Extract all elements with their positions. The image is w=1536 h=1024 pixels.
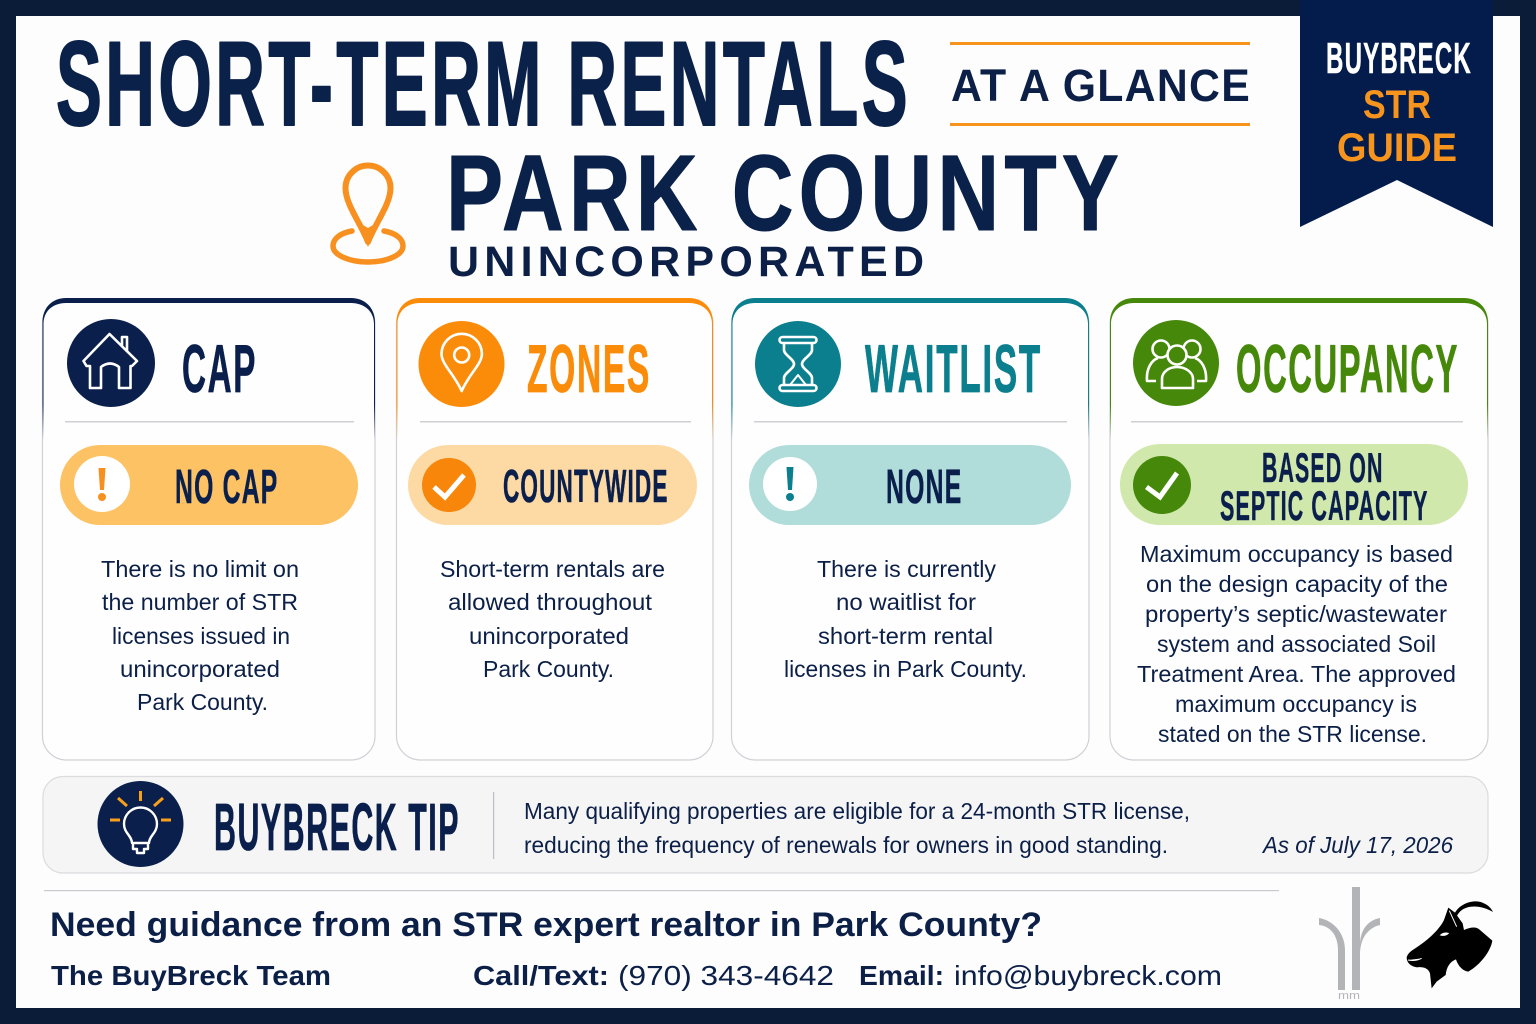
- text: occupancy description: system and associated Soil: [1157, 631, 1436, 657]
- footer contact line: Email:: [859, 960, 944, 991]
- text: tip body: Many qualifying properties are eligible for a 24-month STR license,: [524, 798, 1190, 824]
- icon: people: [1133, 320, 1219, 406]
- panel: occupancy: [1110, 298, 1488, 760]
- status pill: no cap: [60, 445, 358, 525]
- text: zones description: Short-term rentals are: [440, 556, 665, 582]
- text: occupancy description: stated on the STR license.: [1158, 721, 1427, 747]
- ribbon: buybreck str guide: STR: [1363, 83, 1431, 127]
- status pill: based on septic capacity: [1120, 444, 1468, 529]
- text: occupancy description: maximum occupancy is: [1175, 691, 1417, 717]
- text: zones description: allowed throughout: [448, 589, 652, 615]
- subtitle: at a glance: AT A GLANCE: [951, 60, 1251, 111]
- text: cap description: unincorporated: [120, 656, 280, 682]
- status pill: countywide: COUNTYWIDE: [503, 460, 668, 512]
- text: occupancy description: property’s septic/wastewater: [1145, 601, 1447, 627]
- footer contact line: The BuyBreck Team: [51, 960, 331, 991]
- status pill: no cap: NO CAP: [175, 461, 278, 514]
- panel: zones: ZONES: [527, 331, 651, 407]
- status pill: none: [749, 445, 1071, 525]
- text: cap description: [101, 556, 299, 715]
- text: waitlist description: licenses in Park County.: [784, 656, 1027, 682]
- footer contact line: (970) 343-4642: [618, 960, 834, 991]
- logo: grey mm mark: [1319, 887, 1380, 1002]
- status pill: none: NONE: [886, 461, 962, 514]
- text: waitlist description: short-term rental: [818, 623, 993, 649]
- icon: pin: [418, 321, 504, 407]
- panel: buybreck tip: BUYBRECK TIP: [214, 790, 460, 865]
- text: tip body: reducing the frequency of renewals for owners in good standing.: [524, 832, 1168, 858]
- icon: location pin: [333, 166, 403, 262]
- text: occupancy description: Maximum occupancy is based: [1140, 541, 1453, 567]
- panel: cap: [42, 298, 375, 760]
- text: tip body: [524, 798, 1190, 858]
- heading: waitlist: WAITLIST: [865, 331, 1042, 407]
- text: occupancy description: Treatment Area. The approved: [1137, 661, 1456, 687]
- ribbon: buybreck str guide: GUIDE: [1337, 126, 1457, 170]
- panel: buybreck tip: [43, 776, 1488, 873]
- status pill: based on septic capacity: BASED ON: [1262, 444, 1384, 491]
- ribbon: buybreck str guide: [1300, 0, 1493, 227]
- footer contact line: info@buybreck.com: [954, 960, 1222, 991]
- status pill: countywide: [408, 445, 697, 525]
- subtitle: at a glance: [950, 42, 1251, 126]
- text: cap description: Park County.: [137, 689, 268, 715]
- text: zones description: [440, 556, 665, 682]
- text: occupancy description: [1137, 541, 1456, 747]
- heading: park county: PARK COUNTY: [446, 132, 1124, 253]
- subheading: unincorporated: UNINCORPORATED: [448, 238, 924, 286]
- text: zones description: Park County.: [483, 656, 614, 682]
- title: short-term rentals: SHORT-TERM RENTALS: [56, 17, 911, 151]
- text: cap description: There is no limit on: [101, 556, 299, 582]
- panel: waitlist: [732, 298, 1089, 760]
- text: occupancy description: on the design capacity of the: [1146, 571, 1448, 597]
- footer contact line: Call/Text:: [473, 960, 609, 991]
- text: waitlist description: [784, 556, 1027, 682]
- icon: light bulb: [98, 781, 184, 867]
- text: waitlist description: no waitlist for: [836, 589, 976, 615]
- text: cap description: the number of STR: [102, 589, 298, 615]
- text: cap description: licenses issued in: [112, 623, 290, 649]
- footer contact line: [51, 960, 1222, 991]
- panel: zones: [396, 298, 713, 760]
- logo: goat head: [1407, 901, 1493, 988]
- icon: house: [67, 319, 155, 407]
- text: zones description: unincorporated: [469, 623, 629, 649]
- text: waitlist description: There is currently: [817, 556, 996, 582]
- footer heading: Need guidance from an STR expert realtor in Park County?: [50, 906, 1042, 944]
- panel: cap: CAP: [182, 331, 257, 407]
- text: date: As of July 17, 2026: [1261, 832, 1454, 858]
- logo: grey mm mark: mm: [1338, 990, 1360, 1002]
- icon: hourglass: [755, 321, 841, 407]
